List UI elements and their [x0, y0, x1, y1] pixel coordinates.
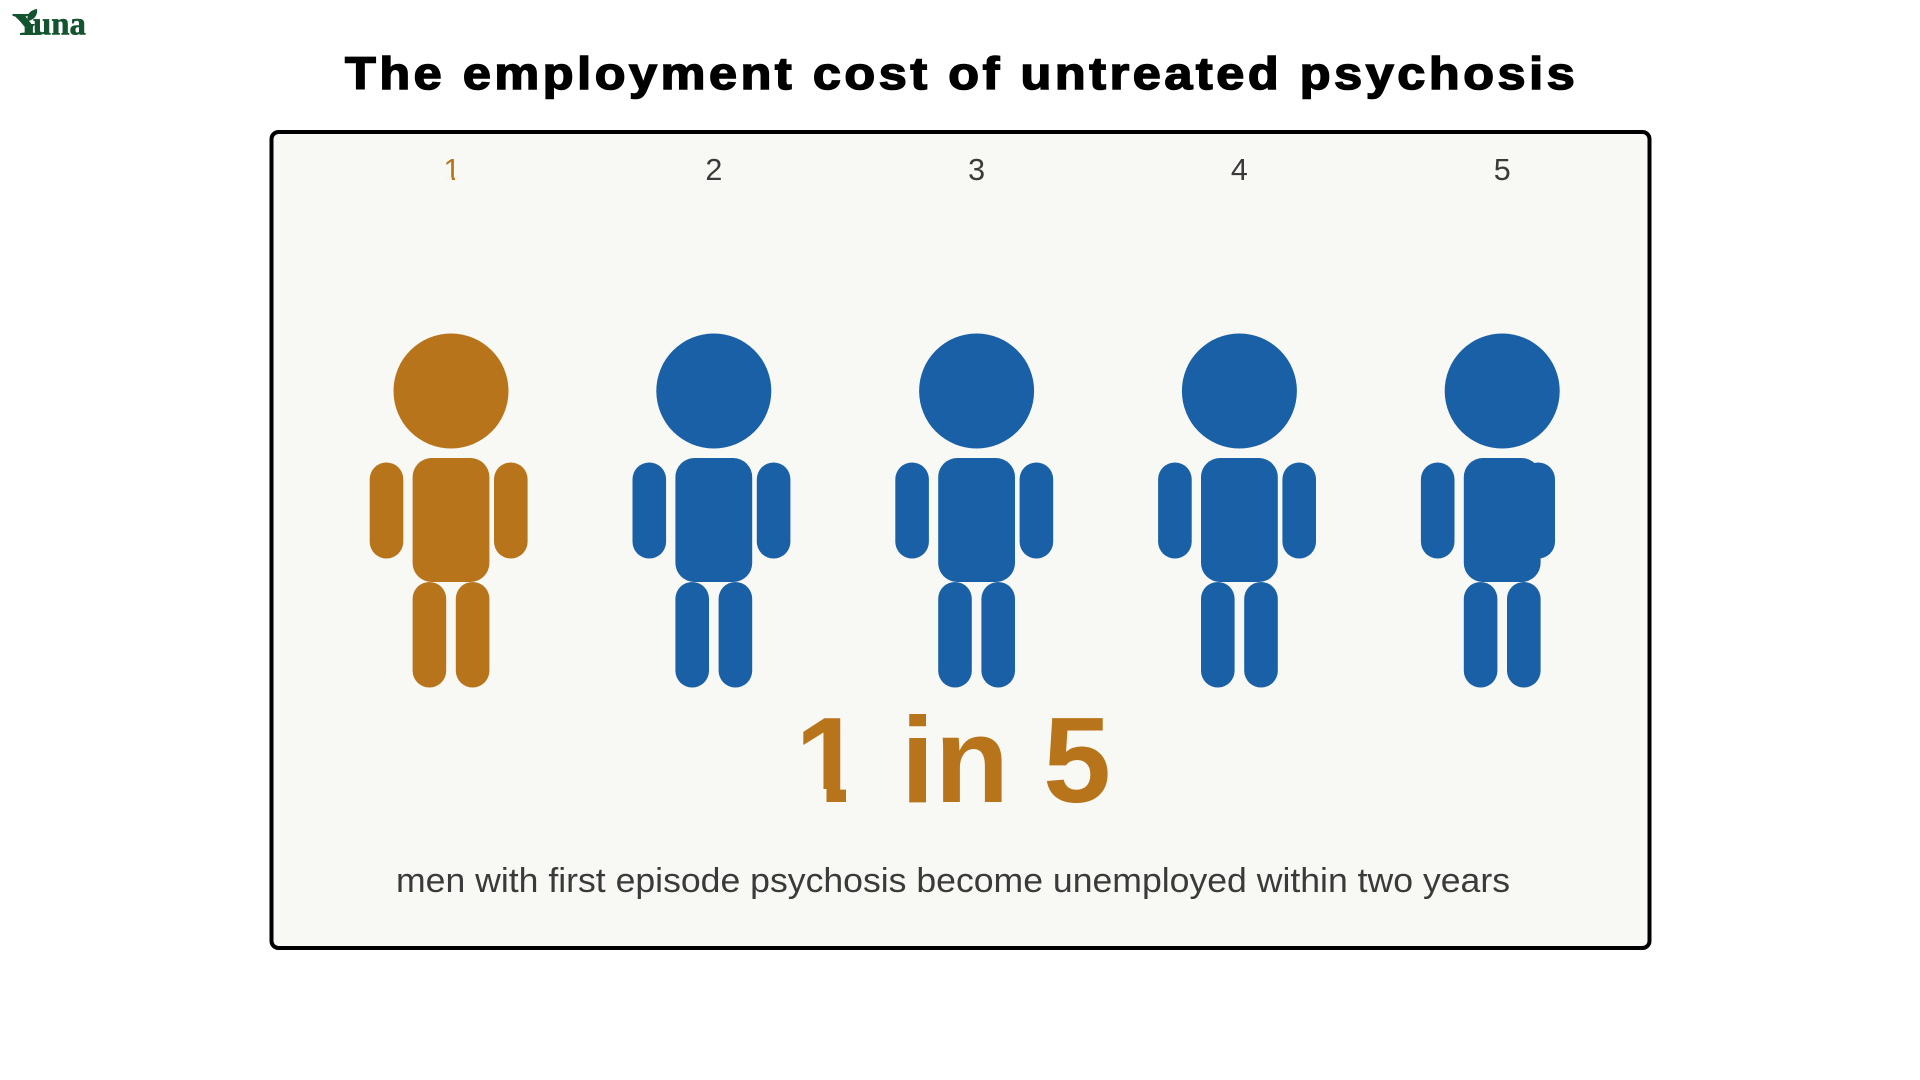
figure number 5: 5: [1494, 153, 1511, 187]
icon: person 3: [895, 334, 1053, 688]
panel: statistic card: [272, 132, 1650, 948]
icon: person 2: [632, 334, 790, 688]
statistic: 1 in 5: 1 in 5: [795, 692, 1111, 828]
icon: person 4: [1158, 334, 1316, 688]
icon: person 5: [1421, 334, 1560, 688]
title: The employment cost of untreated psychosis: [345, 49, 1575, 99]
logo: Yuna: una: [33, 6, 86, 42]
logo: Yuna: Y: [12, 6, 44, 42]
caption: men with first episode psychosis become unemployed within two years: [396, 862, 1510, 900]
figure number 4: 4: [1231, 153, 1248, 187]
figure number 2: 2: [705, 153, 722, 187]
icon: person 1 highlighted: [370, 334, 528, 688]
figure number 1: 1: [444, 153, 460, 187]
figure number 3: 3: [968, 153, 985, 187]
icon: leaf: [27, 9, 37, 21]
